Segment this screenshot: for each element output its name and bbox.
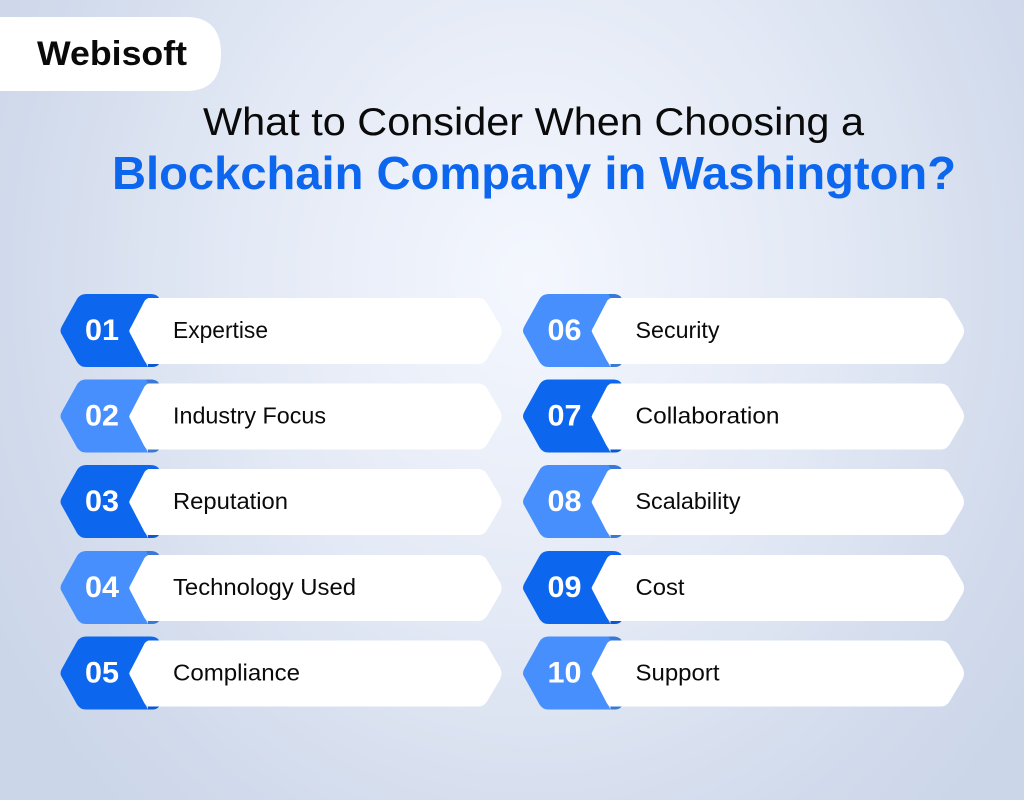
item 03: 03 bbox=[85, 485, 119, 518]
item 10: 10 bbox=[548, 656, 582, 690]
item 09: 09 bbox=[548, 571, 582, 604]
title bbox=[112, 101, 956, 199]
item 03: Reputation bbox=[173, 488, 288, 514]
item 08: Scalability bbox=[636, 488, 741, 514]
item 06: Security bbox=[636, 317, 720, 343]
title highlight: Blockchain Company in Washington? bbox=[112, 147, 956, 199]
item 01: 01 bbox=[85, 314, 119, 347]
item 10 bbox=[523, 636, 964, 710]
item 08: 08 bbox=[548, 485, 582, 518]
item 06: 06 bbox=[548, 314, 582, 347]
item 01: Expertise bbox=[173, 317, 268, 343]
item 08 bbox=[523, 465, 964, 538]
logo badge bbox=[0, 17, 221, 91]
item 02 bbox=[60, 380, 502, 452]
item 07: Collaboration bbox=[636, 402, 780, 428]
item 01 bbox=[60, 294, 502, 367]
item 02: 02 bbox=[85, 400, 119, 432]
item 04: Technology Used bbox=[173, 574, 356, 600]
item 02: Industry Focus bbox=[173, 402, 326, 428]
item 07: 07 bbox=[548, 400, 582, 432]
item 05: 05 bbox=[85, 656, 119, 690]
item 05: Compliance bbox=[173, 660, 300, 686]
item 04 bbox=[60, 551, 502, 624]
logo wordmark: Webisoft bbox=[37, 35, 187, 73]
title: What to Consider When Choosing a bbox=[203, 101, 864, 144]
item 09: Cost bbox=[636, 574, 685, 600]
item 06 bbox=[523, 294, 964, 367]
item 03 bbox=[60, 465, 502, 538]
item 07 bbox=[523, 380, 964, 452]
item 05 bbox=[60, 636, 502, 710]
item 10: Support bbox=[636, 660, 720, 686]
item 04: 04 bbox=[85, 571, 119, 604]
item 09 bbox=[523, 551, 964, 624]
